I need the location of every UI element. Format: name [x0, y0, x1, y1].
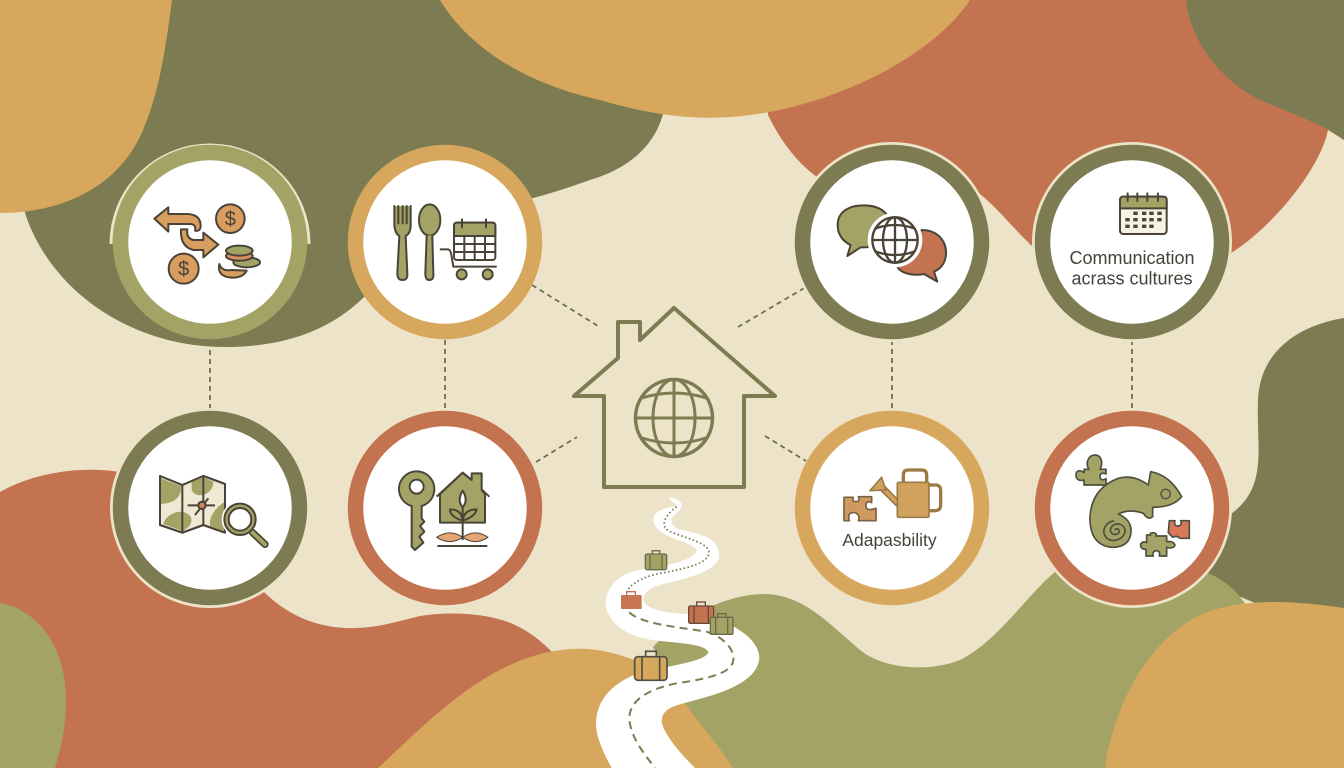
blob: sage bottom left — [0, 603, 66, 768]
ring — [356, 152, 534, 332]
icon: key and house with plant — [399, 471, 489, 550]
panel: research map circle — [110, 408, 310, 608]
label: adaptability: Adapasbility — [842, 530, 937, 550]
panel: food and groceries circle — [356, 152, 534, 332]
panel: adaptability circle — [802, 418, 982, 598]
suitcase: sage small — [645, 551, 667, 570]
icon: money exchange — [154, 204, 260, 284]
panel: housing key circle — [356, 418, 534, 598]
blob: gold bottom right — [1105, 602, 1344, 768]
blob: gold top centre — [440, 0, 970, 118]
suitcase: sage medium — [710, 614, 733, 634]
central house with globe icon — [574, 308, 775, 487]
blob: sage hill bottom right — [653, 568, 1260, 768]
suitcase: terracotta small — [621, 592, 642, 609]
label: communication across cultures: acrass cultures — [1071, 268, 1193, 288]
ring — [1042, 418, 1222, 598]
cream arc — [111, 145, 309, 244]
ring — [356, 418, 534, 598]
panel: communication across cultures circle — [1032, 142, 1232, 342]
cream outline — [1032, 408, 1232, 608]
blob: gold top left — [0, 0, 172, 213]
suitcase: gold large — [635, 651, 667, 680]
panel: chameleon circle — [1032, 408, 1232, 608]
cream outline — [1032, 142, 1232, 342]
blob: gold hill bottom centre — [378, 649, 760, 768]
panel: communication bubbles circle — [792, 142, 992, 342]
ring — [1042, 152, 1222, 332]
road surface — [596, 497, 759, 768]
cream outline — [110, 408, 310, 608]
blob: dark olive top left — [25, 0, 665, 347]
blob: terracotta top right — [760, 0, 1344, 255]
blob: dark olive top right — [1186, 0, 1344, 140]
icon: money exchange: $ — [178, 259, 189, 281]
icon: calendar — [1120, 193, 1167, 234]
ring — [120, 418, 300, 598]
icon: speech bubbles and globe — [838, 205, 946, 282]
panel: finances circle — [111, 145, 309, 332]
icon: cutlery and shopping calendar — [394, 204, 496, 280]
winding road with suitcases — [596, 497, 759, 768]
ring — [802, 418, 982, 598]
icon: puzzle piece and watering can — [844, 470, 941, 521]
icon: chameleon and puzzle pieces — [1076, 455, 1189, 556]
road centre line — [627, 507, 733, 768]
blob: dark olive right — [1200, 318, 1344, 640]
blob: terracotta bottom left — [0, 470, 552, 768]
ring — [802, 152, 982, 332]
cream outline — [792, 142, 992, 342]
icon: map and magnifier — [160, 476, 265, 544]
ring — [120, 152, 300, 332]
label: communication across cultures: Communication — [1069, 248, 1195, 268]
icon: money exchange: $ — [225, 209, 236, 231]
dashed connectors — [210, 285, 1132, 462]
suitcase: terracotta medium — [689, 602, 714, 623]
